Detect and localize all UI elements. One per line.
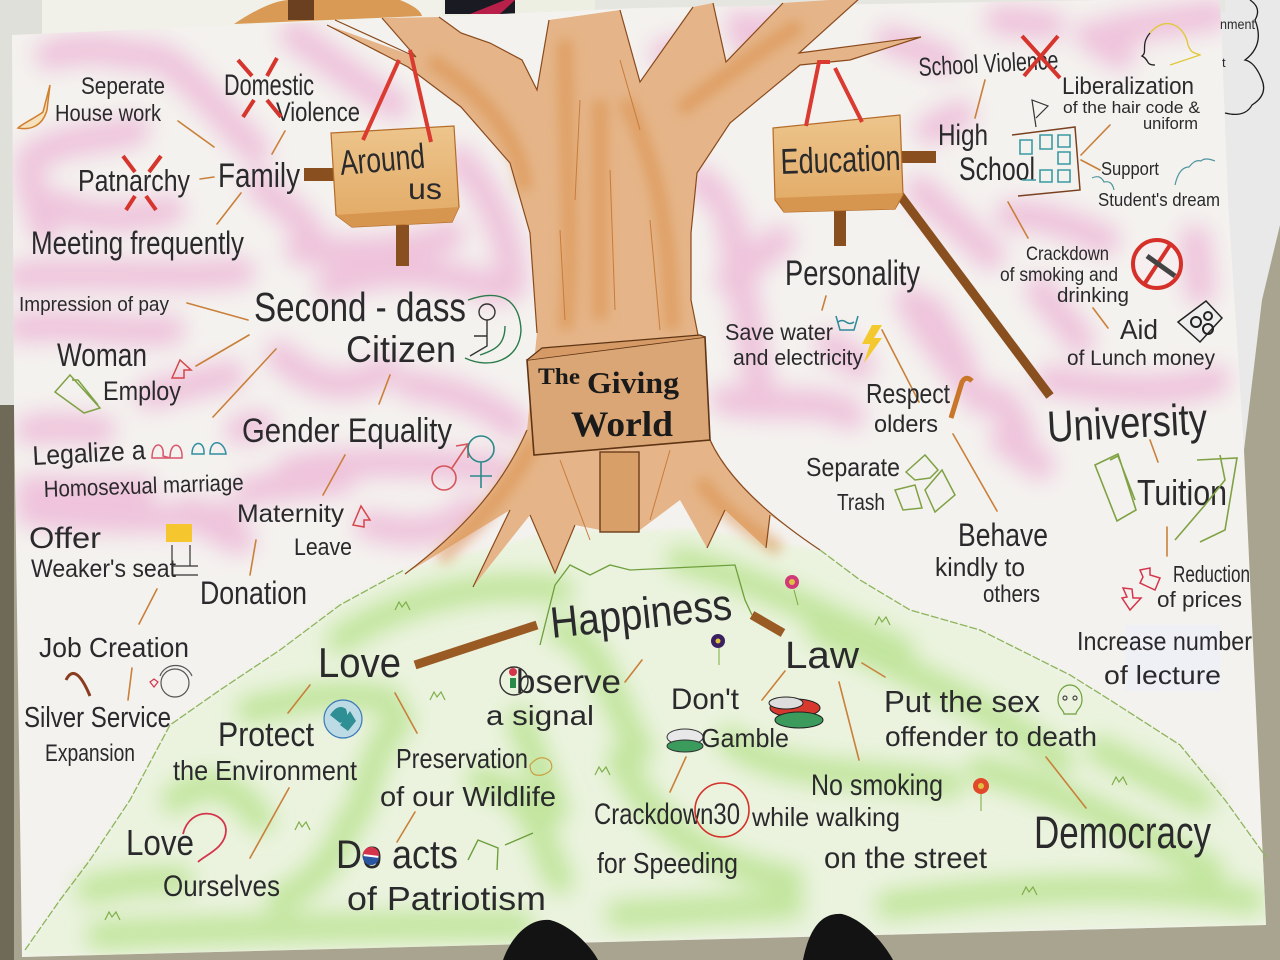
sign board xyxy=(331,126,459,227)
personality items: others xyxy=(983,581,1040,608)
second-class citizen items: Offer xyxy=(29,522,101,555)
second-class citizen items: Citizen xyxy=(346,329,456,370)
sign text: Education xyxy=(780,137,901,182)
neighbouring cloud sketch: t xyxy=(1222,55,1226,70)
icon: grandmother xyxy=(66,666,192,697)
second-class citizen items xyxy=(19,284,466,767)
personality items: Personality xyxy=(785,254,920,293)
sign post xyxy=(600,452,639,532)
branch: Education text xyxy=(725,24,1252,691)
personality items xyxy=(725,254,1048,608)
high school items: Support xyxy=(1101,159,1159,179)
high school items: Crackdown xyxy=(1026,244,1109,265)
hill outline xyxy=(25,550,1266,950)
second-class citizen items: Leave xyxy=(294,534,352,561)
icon: seat sign xyxy=(166,524,198,575)
love items xyxy=(126,639,621,917)
icon: crossed marks xyxy=(123,58,281,210)
university items: of lecture xyxy=(1104,660,1221,690)
family items xyxy=(31,69,360,261)
university items xyxy=(1046,395,1252,691)
family items: Patnarchy xyxy=(78,163,190,198)
second-class citizen items: Homosexual marriage xyxy=(43,469,244,502)
icon: down arrows xyxy=(1122,568,1160,610)
sign arms xyxy=(304,168,409,266)
tree xyxy=(327,0,921,587)
icon: couples xyxy=(152,443,226,458)
second-class citizen items: Woman xyxy=(57,337,147,373)
law items: Crackdown30 xyxy=(594,798,740,831)
icons: law branch xyxy=(667,685,1082,837)
second-class citizen items: Second - dass xyxy=(254,284,466,330)
personality items: kindly to xyxy=(935,552,1025,582)
sign text xyxy=(338,137,442,206)
tree trunk and branches xyxy=(327,0,921,587)
love items: the Environment xyxy=(173,755,357,786)
second-class citizen items: Gender Equality xyxy=(242,412,452,450)
second-class citizen items: Impression of pay xyxy=(19,294,169,316)
icon: no smoking xyxy=(1133,240,1181,288)
icons: love branch xyxy=(183,667,552,870)
university items: Increase number xyxy=(1077,626,1252,656)
family items: House work xyxy=(55,100,161,126)
personality items: Save water xyxy=(725,319,833,345)
law items: on the street xyxy=(824,842,988,875)
high school items: Student's dream xyxy=(1098,190,1220,210)
sign hanging ropes xyxy=(806,62,862,126)
personality items: olders xyxy=(874,411,938,438)
sign title: The xyxy=(538,364,580,389)
love items: Love xyxy=(126,822,194,863)
sign title xyxy=(538,364,679,444)
sign arms xyxy=(834,151,1050,396)
high school items: School Violence xyxy=(918,45,1059,82)
grass tufts xyxy=(105,602,1127,920)
law items: Law xyxy=(785,635,860,677)
sign title: World xyxy=(571,404,673,444)
sign: Around us xyxy=(304,50,459,266)
icon: broom xyxy=(18,85,50,129)
neighbouring cloud sketch: nment xyxy=(1220,16,1255,32)
icon: wheelchair person xyxy=(465,295,521,363)
family items: Family xyxy=(218,157,300,195)
family items: Violence xyxy=(276,97,360,127)
love items: Love xyxy=(318,639,401,686)
law items: offender to death xyxy=(885,721,1097,752)
sign hanging ropes xyxy=(363,50,431,142)
high school items: of Lunch money xyxy=(1067,347,1215,370)
law items: Don't xyxy=(671,683,740,716)
branch: Happiness text xyxy=(126,565,1211,917)
green watercolor hill xyxy=(22,530,1266,957)
personality items: Respect xyxy=(866,378,950,409)
high school items: uniform xyxy=(1143,114,1198,133)
personality items: Trash xyxy=(837,489,885,515)
high school items: High xyxy=(938,119,988,152)
second-class citizen items: Maternity xyxy=(237,500,345,528)
second-class citizen items: Expansion xyxy=(45,740,135,767)
family items: Meeting frequently xyxy=(31,225,244,261)
icon: crossed marks school violence xyxy=(1022,36,1060,78)
high school items: School xyxy=(959,151,1035,187)
personality items: and electricity xyxy=(733,345,863,370)
law items: Gamble xyxy=(701,723,789,753)
high school items xyxy=(918,45,1220,370)
branch: Around us text xyxy=(18,58,521,767)
icon: clouds xyxy=(1092,159,1215,190)
family items: Domestic xyxy=(224,69,314,102)
law items: for Speeding xyxy=(597,848,738,880)
university items: of prices xyxy=(1157,587,1242,612)
second-class citizen items: Legalize a xyxy=(32,435,147,471)
love items: Do acts xyxy=(336,833,458,877)
personality items: Separate xyxy=(806,452,900,482)
family items: Seperate xyxy=(81,73,165,100)
heading: Happiness: Happiness xyxy=(548,580,734,648)
university items: Tuition xyxy=(1137,472,1227,513)
personality items: Behave xyxy=(958,517,1048,553)
icon: girl hair xyxy=(1142,24,1200,65)
icon: money and up arrows xyxy=(55,360,370,527)
icon: school building xyxy=(1012,100,1080,196)
icon: recycle xyxy=(895,455,955,512)
love items: Protect xyxy=(218,716,314,754)
sign board xyxy=(773,115,903,212)
second-class citizen items: Employ xyxy=(103,376,181,406)
high school items: of the hair code & xyxy=(1063,98,1201,117)
law items: No smoking xyxy=(811,769,943,802)
icon: water and lightning xyxy=(836,316,882,363)
icon: gender symbols xyxy=(432,436,494,490)
pink watercolor sky xyxy=(20,15,1215,540)
sign text: Around xyxy=(338,137,426,183)
neighbouring cloud sketch xyxy=(1220,0,1264,114)
law items: Put the sex xyxy=(884,684,1040,719)
icon: cane xyxy=(951,378,972,418)
sign: The Giving World xyxy=(527,335,710,532)
sign: Education xyxy=(773,62,1050,396)
university items: Reduction xyxy=(1173,561,1250,587)
second-class citizen items: Donation xyxy=(200,575,307,611)
high school items: drinking xyxy=(1057,285,1129,307)
law items: while walking xyxy=(751,802,900,832)
high school items: of smoking and xyxy=(1000,265,1118,286)
sign text: us xyxy=(408,173,442,206)
love items: of Patriotism xyxy=(347,880,546,917)
shoes xyxy=(503,914,893,960)
icon: lunch tray xyxy=(1178,301,1222,342)
high school items: Aid xyxy=(1120,314,1158,345)
second-class citizen items: Silver Service xyxy=(24,702,171,734)
sign board xyxy=(527,337,710,455)
second-class citizen items: Weaker's seat xyxy=(31,555,176,583)
love items: Preservation xyxy=(396,743,528,774)
law items: Democracy xyxy=(1034,807,1211,858)
law items xyxy=(594,635,1211,880)
love items: a signal xyxy=(486,700,594,731)
second-class citizen items: Job Creation xyxy=(39,632,189,663)
high school items: Liberalization xyxy=(1062,73,1194,100)
love items: bserve xyxy=(516,663,621,700)
icon: money xyxy=(1095,454,1237,542)
icons: flowers xyxy=(711,575,989,811)
connector lines xyxy=(128,80,1167,858)
love items: Ourselves xyxy=(163,870,280,903)
university items: University xyxy=(1046,395,1208,452)
grass frame xyxy=(540,565,752,645)
love items: of our Wildlife xyxy=(380,781,556,812)
sign title: Giving xyxy=(587,365,679,400)
